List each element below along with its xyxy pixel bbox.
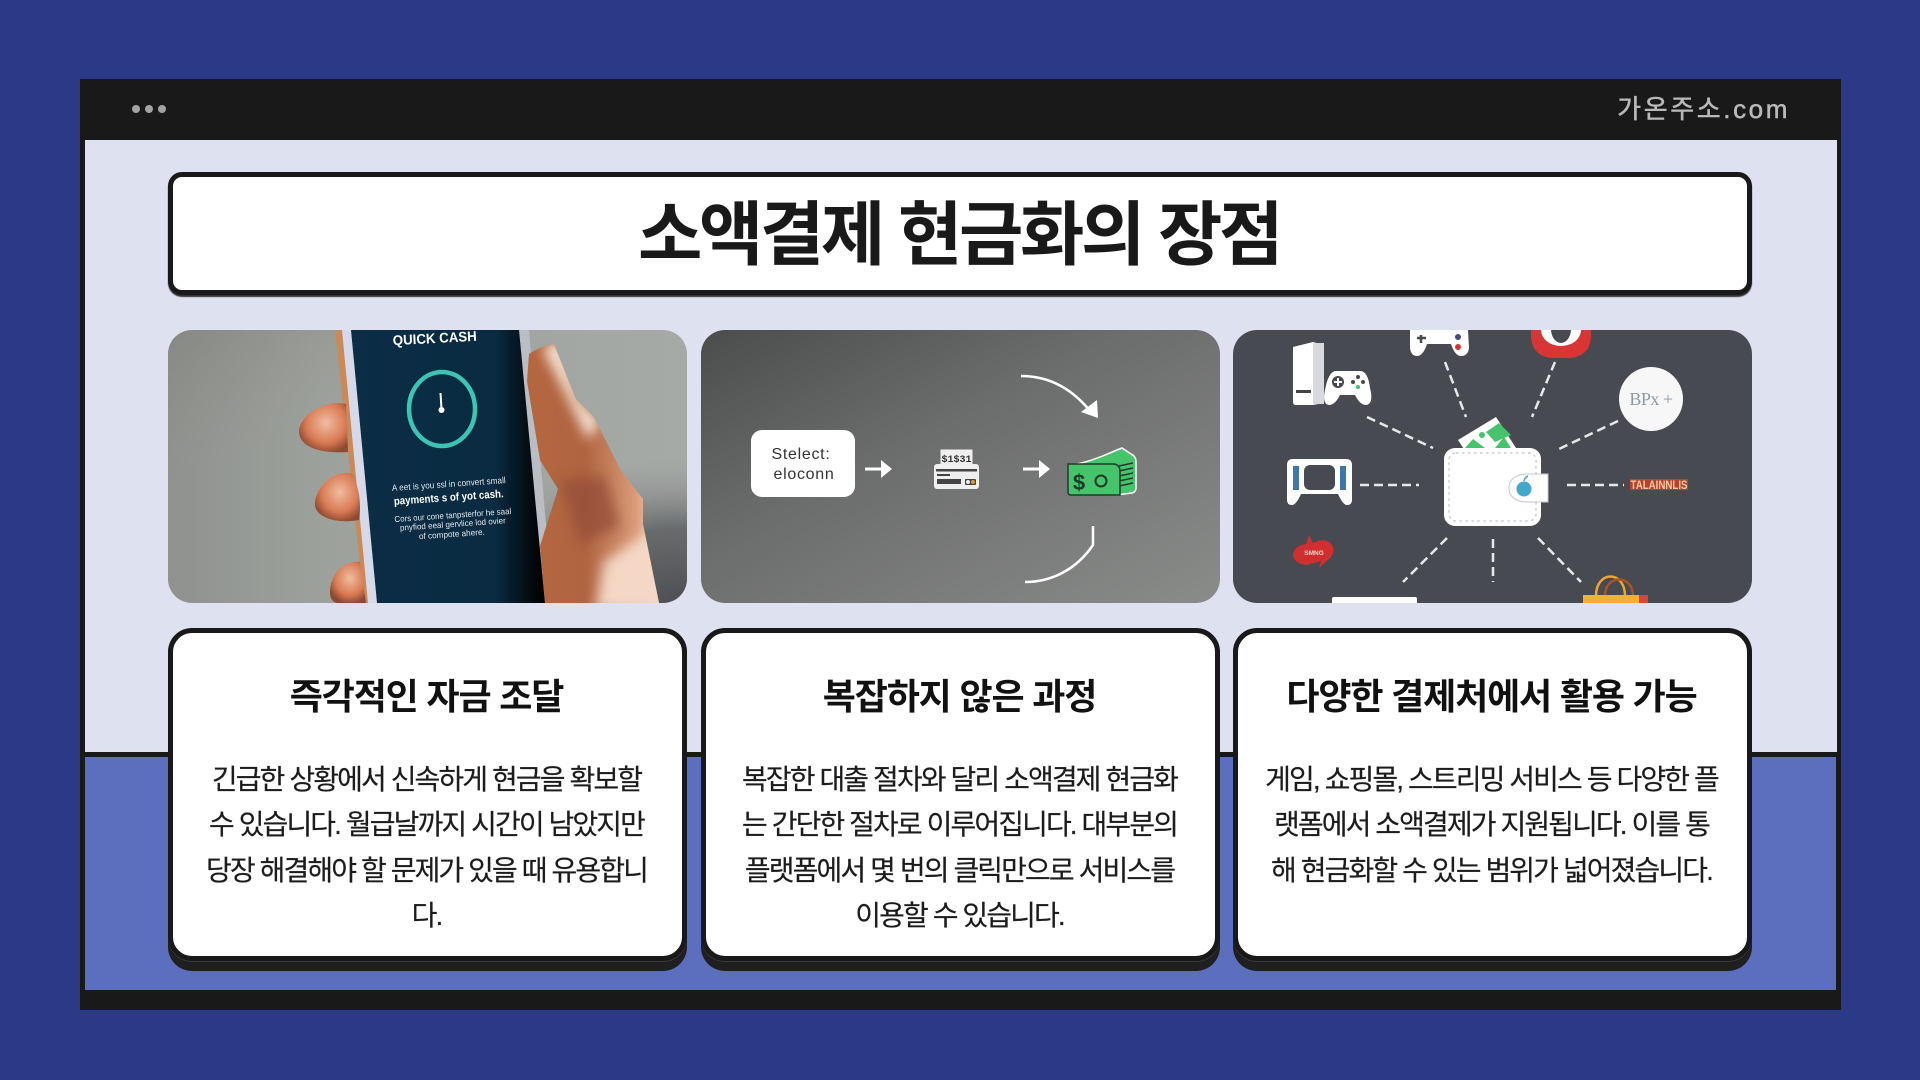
card body text <box>206 764 647 931</box>
white bar <box>1332 597 1417 603</box>
cash stack icon <box>1068 448 1136 495</box>
card body text <box>742 764 1178 931</box>
image: phone showing quick cash <box>168 330 687 603</box>
card: simple process <box>701 628 1220 961</box>
image: simple conversion flow <box>701 330 1220 603</box>
card body text: 당장 해결해야 할 문제가 있을 때 유용합니 <box>206 855 647 886</box>
fingers <box>299 403 366 603</box>
window control dots <box>132 105 166 113</box>
game console icon <box>1293 342 1371 405</box>
dashed connectors <box>1360 362 1624 582</box>
hand and thumb <box>527 344 659 603</box>
payment terminal icon <box>934 450 979 489</box>
phone body: payments s of yot cash. <box>394 488 504 508</box>
streaming service badge: BPx + <box>1629 389 1673 409</box>
card body text: 수 있습니다. 월급날까지 시간이 남았지만 <box>209 809 644 840</box>
card: immediate funding <box>168 628 687 961</box>
phone body <box>335 328 553 603</box>
curved line bottom <box>1025 526 1093 582</box>
cash stack icon: $ <box>1073 470 1085 495</box>
brand label: TALAINNLIS <box>1630 480 1688 492</box>
curved arrow top <box>1021 376 1091 412</box>
arrow <box>1023 468 1039 470</box>
selection box <box>751 430 855 497</box>
wallet icon <box>1444 417 1548 526</box>
top gamepad icon <box>1410 330 1469 356</box>
card body text: 는 간단한 절차로 이루어집니다. 대부분의 <box>742 809 1177 840</box>
lower blue panel <box>85 757 1836 990</box>
card body text: 게임, 쇼핑몰, 스트리밍 서비스 등 다양한 플 <box>1265 764 1718 795</box>
selection box: Stelect: <box>772 446 830 463</box>
card heading: 즉각적인 자금 조달 <box>290 676 563 717</box>
photo background <box>168 330 687 603</box>
selection box: eloconn <box>774 466 834 483</box>
card heading: 복잡하지 않은 과정 <box>823 676 1096 717</box>
phone body: A eet is you ssl in convert small <box>392 475 506 493</box>
red swirl logo: SMNG <box>1304 550 1324 557</box>
card body text: 랫폼에서 소액결제가 지원됩니다. 이를 통 <box>1274 809 1709 840</box>
card body text: 해 현금화할 수 있는 범위가 넓어졌습니다. <box>1271 855 1712 886</box>
red swirl logo <box>1293 535 1334 568</box>
upper light panel <box>85 140 1837 752</box>
card body text: 플랫폼에서 몇 번의 클릭만으로 서비스를 <box>745 855 1174 886</box>
site address: 가온주소.com <box>1617 94 1790 124</box>
phone body: Cors our cone tanpsterfor he saal <box>394 506 512 524</box>
arrowhead <box>1039 460 1050 478</box>
phone body: of compote ahere. <box>419 527 485 541</box>
phone body: pnyfiod eeal gervlice lod ovier <box>400 515 506 533</box>
arrow <box>865 468 881 470</box>
card: many payment places <box>1233 628 1752 961</box>
card body text: 긴급한 상황에서 신속하게 현금을 확보할 <box>212 764 641 795</box>
title box <box>168 172 1752 295</box>
browser frame <box>80 79 1841 1010</box>
card body text: 이용할 수 있습니다. <box>855 900 1064 931</box>
card body text <box>1265 764 1718 886</box>
arrowhead <box>881 460 892 478</box>
streaming service badge <box>1619 367 1683 431</box>
card body text: 다. <box>412 900 441 931</box>
card body text: 복잡한 대출 절차와 달리 소액결제 현금화 <box>742 764 1177 795</box>
brand label <box>1630 479 1688 490</box>
card heading: 다양한 결제처에서 활용 가능 <box>1286 676 1697 717</box>
shopping bag <box>1583 576 1648 605</box>
heading: 소액결제 현금화의 장점 <box>638 196 1280 274</box>
red logo icon <box>1531 330 1591 358</box>
handheld console icon <box>1287 459 1352 505</box>
image: wallet with platforms <box>1233 330 1752 603</box>
payment terminal icon: $1$31 <box>941 454 972 466</box>
curved arrow head <box>1081 400 1098 418</box>
